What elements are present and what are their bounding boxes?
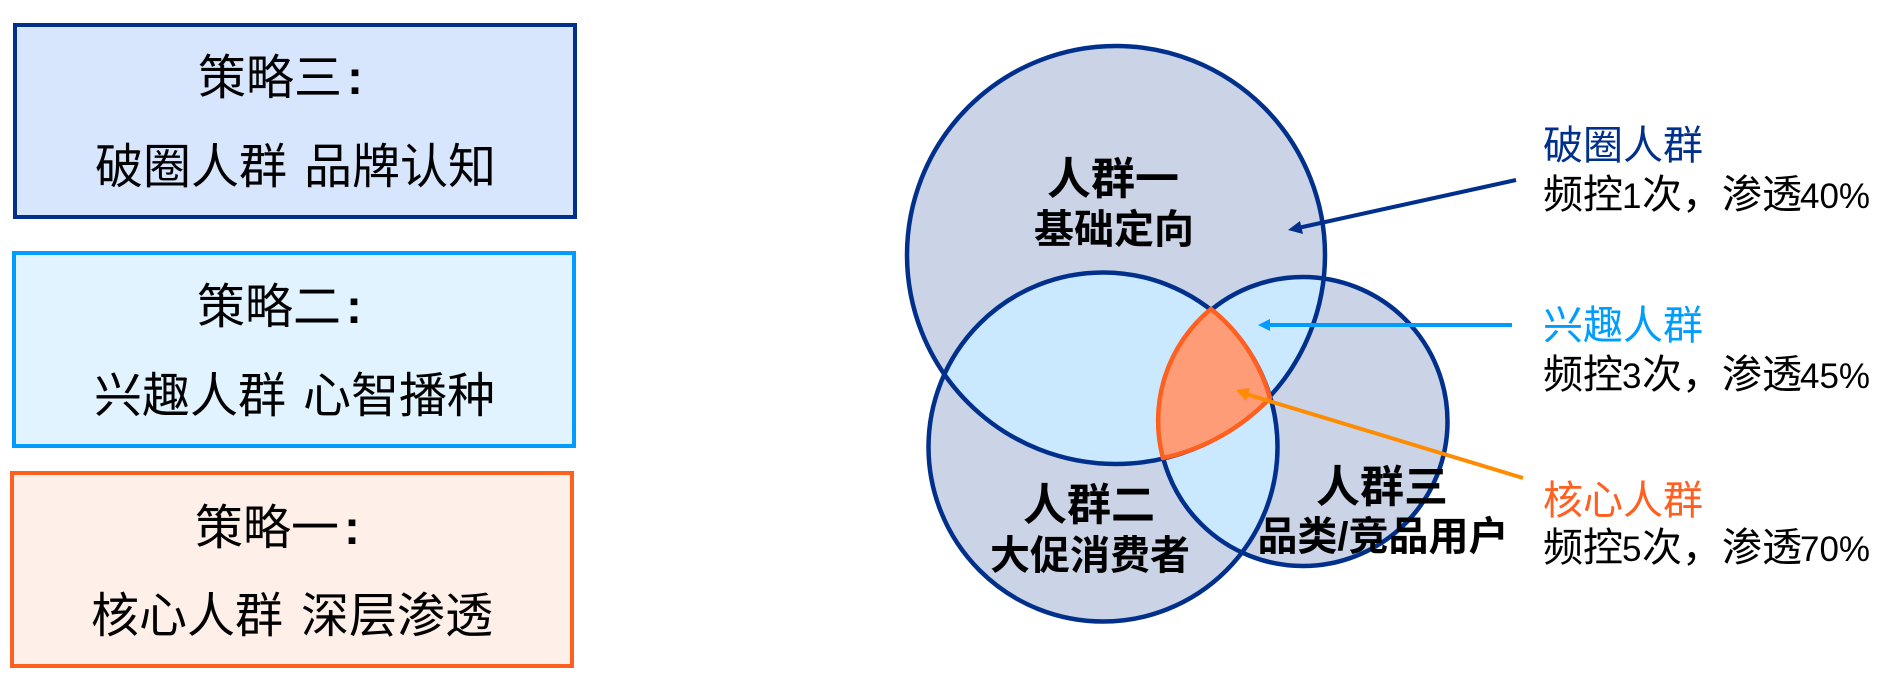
arrow: core audience bbox=[1236, 388, 1523, 478]
callout: core audience: 核心人群 bbox=[1543, 479, 1703, 523]
callout: interest audience: 频控 bbox=[1543, 353, 1623, 397]
callout: breakout audience: 破圈人群 bbox=[1543, 124, 1703, 168]
strategy three title: : bbox=[347, 52, 363, 105]
callout: interest audience: 3 bbox=[1622, 357, 1641, 396]
label: audience two: 人群二 bbox=[1023, 481, 1155, 530]
panel: strategy two bbox=[14, 253, 574, 446]
strategy three title: 策略三 bbox=[198, 52, 342, 105]
strategy three description: 破圈人群 bbox=[95, 141, 287, 194]
callout: interest audience: 渗透 bbox=[1722, 353, 1802, 397]
callout: core audience: 70% bbox=[1800, 530, 1870, 569]
callout: core audience: 渗透 bbox=[1722, 526, 1802, 570]
label: audience two bbox=[990, 481, 1190, 578]
strategy three description: 品牌认知 bbox=[304, 141, 496, 194]
arrow: interest audience bbox=[1258, 319, 1512, 331]
label: audience three: 品类/竞品用户 bbox=[1257, 515, 1509, 559]
venn diagram bbox=[907, 46, 1448, 622]
callout: breakout audience: 1 bbox=[1622, 177, 1641, 216]
strategy two description: 兴趣人群 bbox=[94, 370, 286, 423]
callout: interest audience: 45% bbox=[1800, 357, 1870, 396]
strategy one title: 策略一 bbox=[195, 502, 339, 555]
label: audience one: 基础定向 bbox=[1034, 208, 1194, 252]
strategy two description: 心智播种 bbox=[303, 370, 495, 423]
strategy one title: : bbox=[344, 502, 360, 555]
label: audience one: 人群一 bbox=[1047, 155, 1179, 204]
strategy two title: 策略二 bbox=[197, 281, 341, 334]
callout: breakout audience: 40% bbox=[1800, 177, 1870, 216]
label: audience three bbox=[1257, 463, 1509, 559]
core overlap region bbox=[1158, 309, 1270, 458]
panel: strategy three bbox=[15, 25, 575, 217]
callout: core audience bbox=[1543, 479, 1870, 570]
callout: interest audience: 兴趣人群 bbox=[1543, 304, 1703, 348]
callout: core audience: 次， bbox=[1642, 526, 1722, 570]
strategy two title: : bbox=[346, 281, 362, 334]
label: audience three: 人群三 bbox=[1316, 463, 1448, 512]
panel: strategy one bbox=[12, 473, 572, 666]
strategy one description: 核心人群 bbox=[91, 590, 283, 643]
label: audience two: 大促消费者 bbox=[990, 534, 1190, 578]
label: audience one bbox=[1034, 155, 1194, 252]
callout: interest audience bbox=[1543, 304, 1870, 397]
callout: breakout audience: 频控 bbox=[1543, 173, 1623, 217]
strategy one description: 深层渗透 bbox=[301, 590, 493, 643]
callout: core audience: 频控 bbox=[1543, 526, 1623, 570]
callout: breakout audience: 次， bbox=[1642, 173, 1722, 217]
callout: interest audience: 次， bbox=[1642, 353, 1722, 397]
callout: core audience: 5 bbox=[1622, 530, 1641, 569]
callout: breakout audience bbox=[1543, 124, 1870, 217]
arrow: breakout audience bbox=[1288, 180, 1516, 234]
callout: breakout audience: 渗透 bbox=[1722, 173, 1802, 217]
